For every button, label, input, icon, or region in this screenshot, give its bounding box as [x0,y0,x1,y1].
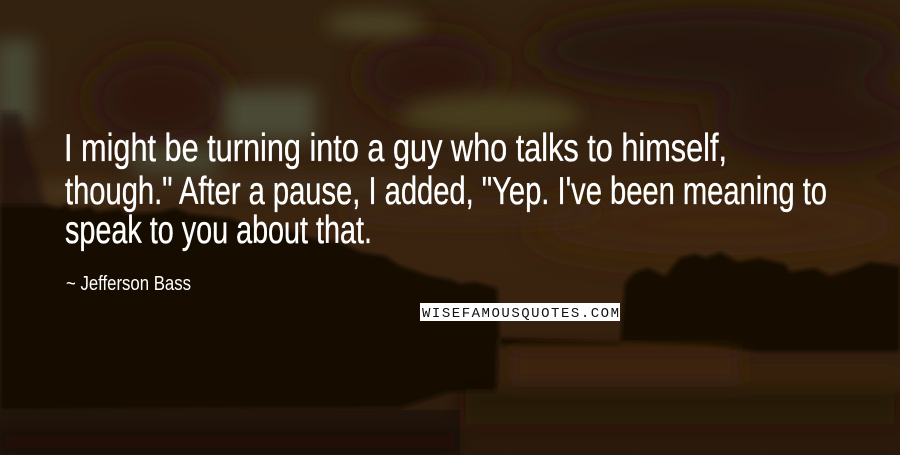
background: faint tall tree at left [0,112,46,210]
quote text: speak to you about that. [65,209,372,252]
quote text [64,127,827,252]
watermark logo: WISEFAMOUSQUOTES.COM [422,306,619,322]
background: forested hillside and distant treeline [0,204,900,410]
author attribution: ~ Jefferson Bass [66,273,191,295]
quote text: I might be turning into a guy who talks to himself, [64,127,727,170]
background: water reflection [0,350,900,455]
